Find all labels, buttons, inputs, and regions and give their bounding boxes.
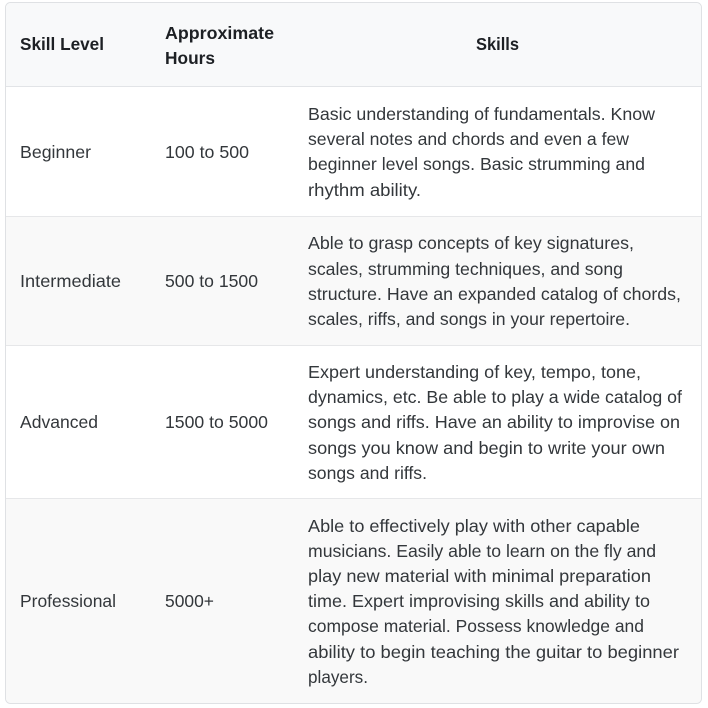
skills: professional: ability to begin teaching the guitar to beginner (308, 642, 679, 662)
skills: advanced: songs you know and begin to write your own (308, 438, 665, 458)
skills: beginner: several notes and chords and even a few (308, 129, 629, 149)
row: beginner (6, 87, 701, 216)
heading: skills: Skills (476, 34, 519, 54)
skills: beginner: rhythm ability. (308, 180, 421, 200)
skills: professional: play new material with minimal preparation (308, 566, 651, 586)
heading: approximate hours (165, 23, 274, 68)
skills: professional: compose material. Possess knowledge and (308, 616, 644, 636)
row: intermediate (6, 217, 701, 346)
skills: advanced: songs and riffs. Have an ability to improvise on (308, 412, 680, 432)
skill level: intermediate: Intermediate (20, 271, 121, 291)
skills: intermediate: scales, strumming techniques, and song (308, 259, 623, 279)
hours: 500 to 1500: 500 to 1500 (165, 271, 258, 291)
skills: advanced: Expert understanding of key, tempo, tone, (308, 362, 641, 382)
skill level: professional: Professional (20, 591, 116, 611)
skills: professional: time. Expert improvising skills and ability to (308, 591, 650, 611)
header row (6, 3, 701, 86)
skills: professional: Able to effectively play with other capable (308, 516, 640, 536)
skills: intermediate: structure. Have an expanded catalog of chords, (308, 284, 681, 304)
hours: 1500 to 5000: 1500 to 5000 (165, 412, 268, 432)
skills: beginner: Basic understanding of fundamentals. Know (308, 104, 655, 124)
skills: advanced: songs and riffs. (308, 463, 427, 483)
hours: 5000+: 5000+ (165, 591, 214, 611)
skill level: beginner: Beginner (20, 142, 91, 162)
row: professional (6, 499, 701, 703)
skills: professional: musicians. Easily able to learn on the fly and (308, 541, 656, 561)
skills: advanced: dynamics, etc. Be able to play a wide catalog of (308, 387, 682, 407)
row: advanced (6, 346, 701, 498)
heading: skill level: Skill Level (20, 34, 104, 54)
skills: beginner (308, 104, 655, 200)
skills: beginner: beginner level songs. Basic strumming and (308, 154, 645, 174)
skills: professional (308, 516, 679, 687)
heading: approximate hours: Hours (165, 48, 215, 68)
skills: intermediate (308, 233, 681, 329)
heading: approximate hours: Approximate (165, 23, 274, 43)
skills: intermediate: scales, riffs, and songs in your repertoire. (308, 309, 630, 329)
skill level: advanced: Advanced (20, 412, 98, 432)
skills: professional: players. (308, 667, 368, 687)
skills: advanced (308, 362, 682, 483)
skills: intermediate: Able to grasp concepts of key signatures, (308, 233, 634, 253)
hours: 100 to 500: 100 to 500 (165, 142, 249, 162)
